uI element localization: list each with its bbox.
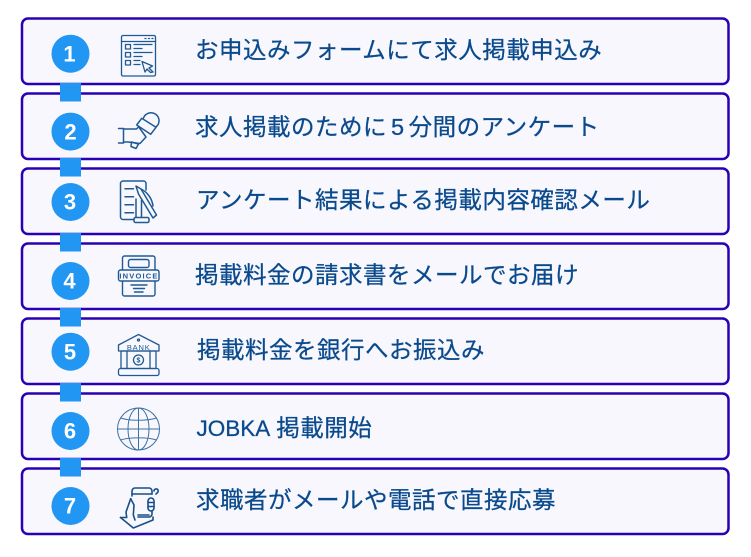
text: step 2: 求人掲載のために 5 分間のアンケート — [195, 114, 600, 140]
number badge 1: 1 — [63, 42, 76, 66]
number badge 4: 4 — [63, 269, 76, 294]
number badge 7: 7 — [64, 494, 76, 519]
icon: online form with cursor — [122, 36, 156, 76]
connectors between steps — [60, 83, 81, 476]
text: step 7: 求職者がメールや電話で直接応募 — [196, 487, 556, 513]
number badge 2: 2 — [64, 119, 77, 144]
icon: bank: BANK — [127, 343, 151, 352]
icon: bank — [118, 334, 159, 376]
text: step 6: JOBKA 掲載開始 — [196, 415, 372, 441]
icon: bank: $ — [137, 358, 141, 364]
number badge 2 — [52, 113, 90, 151]
panel: step 7 card — [22, 468, 728, 534]
number badge 5 — [52, 333, 90, 371]
icon: invoice: INVOICE — [119, 272, 159, 280]
text: step 5: 掲載料金を銀行へお振込み — [197, 337, 485, 363]
panel: step 1 card — [22, 18, 728, 84]
icon: hand holding smartphone — [120, 488, 158, 528]
number badge 1 — [52, 35, 90, 73]
number badge 4 — [52, 262, 90, 300]
number badge 6 — [52, 412, 90, 450]
icon: hand holding microphone — [118, 113, 159, 148]
number badge 5: 5 — [64, 339, 76, 364]
number badge 3 — [52, 183, 90, 221]
panel: step 6 card — [22, 394, 728, 459]
number badge 7 — [52, 487, 90, 525]
icon: document with pen — [120, 181, 156, 222]
text: step 3: アンケート結果による掲載内容確認メール — [196, 187, 650, 213]
number badge 6: 6 — [64, 419, 76, 444]
icon: globe — [118, 408, 160, 450]
text: step 4: 掲載料金の請求書をメールでお届け — [195, 262, 579, 288]
panel: step 2 card — [22, 94, 728, 159]
panel: step 5 card — [22, 318, 728, 384]
number badge 3: 3 — [64, 190, 76, 215]
icon: invoice — [118, 256, 159, 296]
text: step 1: お申込みフォームにて求人掲載申込み — [195, 37, 602, 63]
panel: step 4 card — [22, 244, 728, 309]
panel: step 3 card — [22, 168, 728, 234]
